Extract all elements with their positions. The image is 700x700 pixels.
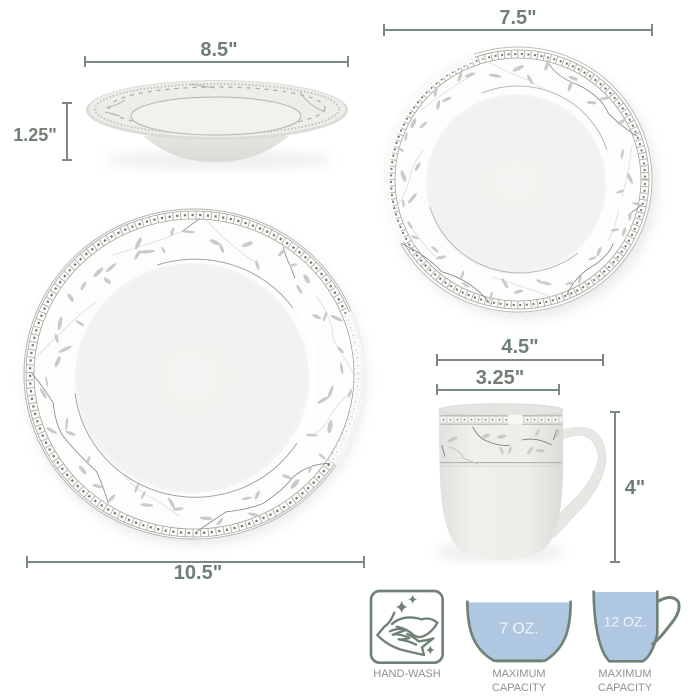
sparkles bbox=[396, 595, 435, 655]
salad plate bbox=[384, 47, 657, 318]
icon: bowl capacity 7 oz bbox=[467, 601, 571, 662]
dimension: bowl height 1.25 bbox=[13, 103, 72, 160]
dimension: bowl width 8.5: 8.5" bbox=[200, 39, 238, 61]
dimension: mug width 4.5 bbox=[437, 336, 603, 366]
dinner plate well bbox=[75, 263, 309, 493]
mug bbox=[434, 404, 606, 560]
label: mug maximum capacity: MAXIMUM bbox=[598, 668, 652, 680]
salad plate well bbox=[426, 94, 606, 274]
icon: bowl capacity 7 oz: 7 OZ. bbox=[499, 620, 539, 637]
mug decor band bbox=[441, 415, 562, 424]
dimension: salad plate width 7.5 bbox=[384, 7, 652, 36]
mug body bbox=[439, 410, 563, 560]
icon: hand-wash bbox=[371, 591, 443, 663]
dimension: mug height 4 bbox=[610, 412, 645, 562]
dimension: bowl width 8.5 bbox=[85, 39, 348, 67]
dinner plate bbox=[24, 209, 366, 545]
dimension: mug rim 3.25: 3.25" bbox=[476, 367, 524, 389]
label: bowl maximum capacity: MAXIMUM bbox=[492, 668, 546, 680]
dimension: dinner plate width 10.5 bbox=[27, 556, 364, 584]
mug handle bbox=[553, 427, 606, 538]
salad plate leaf pattern bbox=[395, 58, 642, 303]
label: bowl maximum capacity: CAPACITY bbox=[492, 682, 547, 694]
dinner plate leaf pattern bbox=[32, 218, 353, 532]
dimension: salad plate width 7.5: 7.5" bbox=[499, 7, 537, 29]
label: hand-wash: HAND-WASH bbox=[373, 668, 441, 680]
dimension: mug height 4: 4" bbox=[625, 477, 645, 499]
label: mug maximum capacity: CAPACITY bbox=[598, 682, 653, 694]
dimension: bowl height 1.25: 1.25" bbox=[13, 125, 57, 145]
dimension: dinner plate width 10.5: 10.5" bbox=[174, 562, 222, 584]
soup bowl bbox=[86, 80, 348, 168]
icon: mug capacity 12 oz: 12 OZ. bbox=[604, 614, 646, 630]
dimension: mug width 4.5: 4.5" bbox=[501, 336, 539, 358]
icon: mug capacity 12 oz bbox=[594, 591, 679, 661]
dimension: mug rim 3.25 bbox=[437, 367, 559, 395]
